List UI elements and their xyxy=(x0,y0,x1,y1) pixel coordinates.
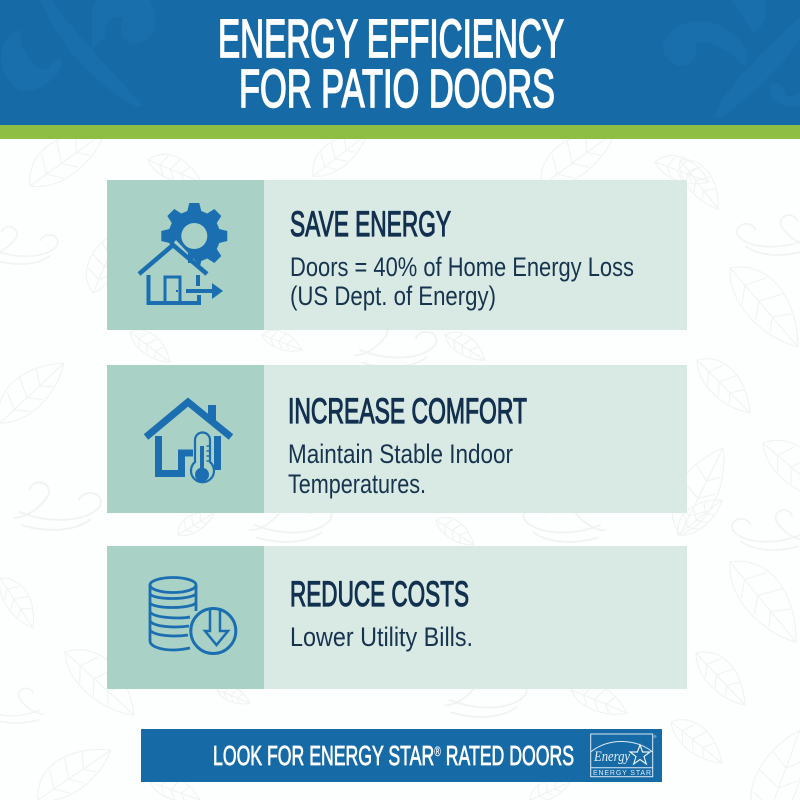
panel: reduce costs xyxy=(107,546,687,689)
icon: energy star logo: ® xyxy=(654,734,656,739)
panel text: save energy: (US Dept. of Energy) xyxy=(290,281,496,311)
header banner xyxy=(0,0,800,125)
panel text: save energy: Doors = 40% of Home Energy Loss xyxy=(290,252,634,282)
icon: coin stack with down arrow xyxy=(150,578,236,654)
panel text: reduce costs: Lower Utility Bills. xyxy=(290,622,473,652)
panel text: reduce costs xyxy=(290,575,473,652)
callout text: ® xyxy=(434,743,441,759)
panel text: reduce costs: REDUCE COSTS xyxy=(290,575,469,614)
panel text: increase comfort: Maintain Stable Indoor xyxy=(288,439,513,469)
icon: energy star logo xyxy=(591,734,656,777)
header ornaments xyxy=(1,0,800,119)
panel text: increase comfort xyxy=(288,392,527,499)
callout: energy star banner xyxy=(141,729,662,782)
icon: energy star logo: Energy xyxy=(593,749,630,765)
icon: energy star logo: ENERGY STAR xyxy=(593,770,651,777)
panel text: save energy: SAVE ENERGY xyxy=(290,205,451,244)
panel text: increase comfort: Temperatures. xyxy=(288,469,426,499)
panel: increase comfort xyxy=(107,365,687,513)
title: ENERGY EFFICIENCY xyxy=(218,9,564,69)
title: FOR PATIO DOORS xyxy=(239,59,555,119)
icon: house with gear and arrow xyxy=(130,203,227,310)
panel: save energy xyxy=(107,180,687,330)
green accent strip xyxy=(0,125,800,139)
callout text: LOOK FOR ENERGY STAR xyxy=(213,740,557,771)
callout text: RATED DOORS xyxy=(441,740,574,771)
icon: house with thermometer xyxy=(146,402,231,482)
panel text: increase comfort: INCREASE COMFORT xyxy=(288,392,527,431)
panel text: save energy xyxy=(290,205,634,311)
title xyxy=(218,9,564,119)
